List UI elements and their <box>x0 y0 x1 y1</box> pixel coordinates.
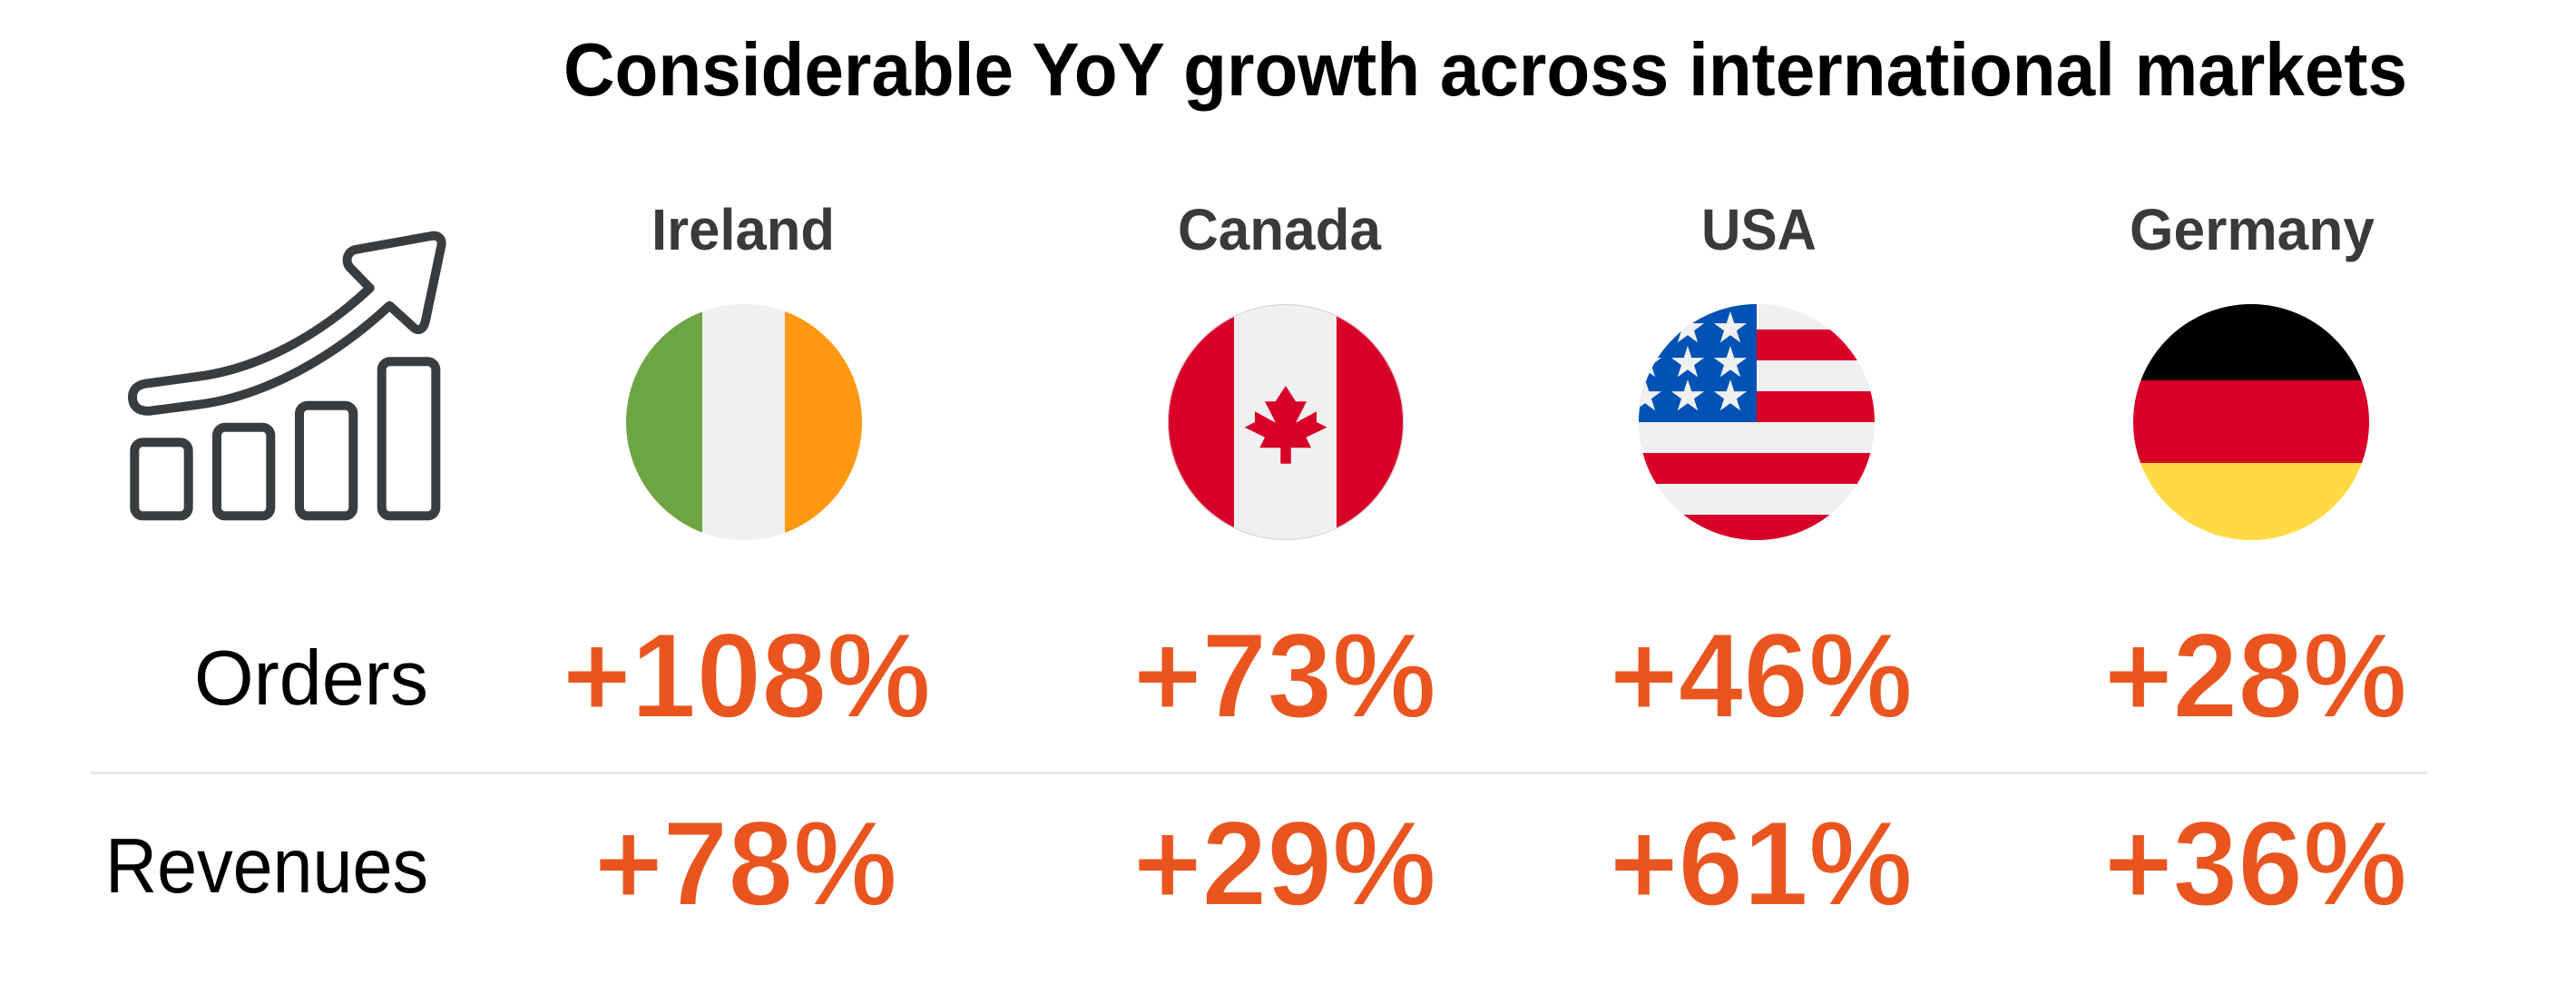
Canada orders value: +73% <box>1133 609 1436 743</box>
icon: Canada flag <box>1168 304 1404 540</box>
Ireland orders value: +108% <box>563 609 931 743</box>
country label: Ireland: Ireland <box>651 197 835 262</box>
icon: Germany flag <box>2133 304 2369 540</box>
icon: growth bars with rising arrow <box>132 236 442 516</box>
icon: USA flag <box>1629 304 1875 540</box>
Canada revenues value: +29% <box>1133 797 1436 931</box>
Ireland revenues value: +78% <box>594 797 897 931</box>
Germany revenues value: +36% <box>2104 797 2407 931</box>
row label: Orders: Orders <box>194 635 428 722</box>
title: Considerable YoY growth across international markets <box>563 27 2407 112</box>
icon: Ireland flag <box>626 304 862 540</box>
USA revenues value: +61% <box>1610 797 1913 931</box>
country label: Canada: Canada <box>1178 197 1381 262</box>
row label: Revenues: Revenues <box>105 823 428 910</box>
USA orders value: +46% <box>1610 609 1913 743</box>
Germany orders value: +28% <box>2104 609 2407 743</box>
country label: Germany: Germany <box>2130 197 2375 262</box>
country label: USA: USA <box>1701 197 1817 262</box>
